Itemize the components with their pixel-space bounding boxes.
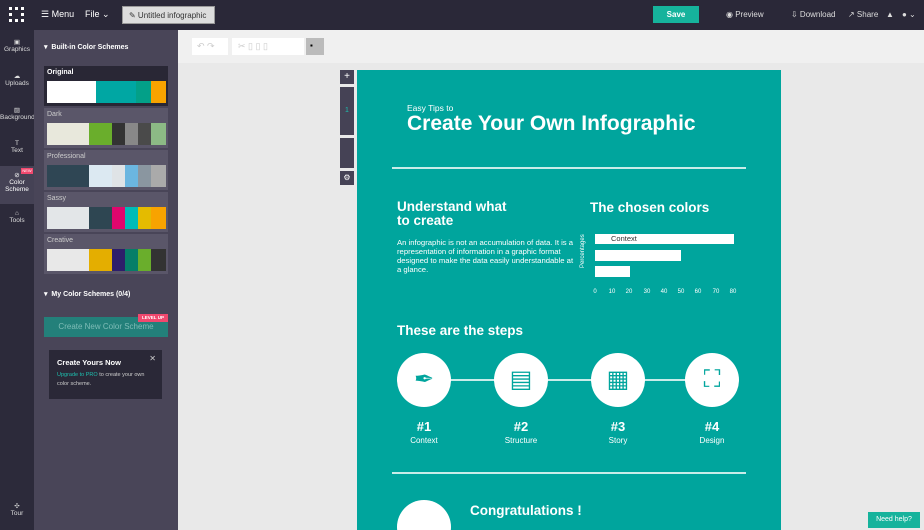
nav actions: ⇩ Download	[791, 10, 836, 19]
icon rail: ⌂	[15, 210, 19, 217]
section: chosen colors chart: 50	[678, 289, 684, 295]
step 2: #2	[514, 419, 528, 434]
nav actions: ▲	[886, 10, 894, 19]
page controls	[340, 70, 354, 185]
color scheme panel	[34, 30, 178, 530]
icon rail: Uploads	[5, 80, 29, 87]
title field: ✎ Untitled infographic	[129, 11, 206, 20]
scheme: creative: Creative	[47, 237, 73, 244]
title field	[122, 6, 215, 24]
icon rail	[0, 30, 34, 530]
scheme: dark: Dark	[47, 111, 62, 118]
icon rail: NEW	[22, 168, 32, 173]
step 4: ⛶	[704, 366, 720, 393]
icon rail: Graphics	[4, 46, 30, 53]
top bar	[0, 0, 924, 30]
step 2: Structure	[505, 436, 537, 445]
active color scheme tab: ⊘	[14, 172, 20, 179]
page controls: +	[344, 71, 350, 82]
scheme: dark	[44, 108, 168, 148]
icon rail: ▨	[14, 107, 20, 114]
section: chosen colors chart: 10	[609, 289, 615, 295]
page controls: ⚙	[343, 173, 351, 182]
step 1	[397, 353, 451, 445]
active color scheme tab	[0, 166, 34, 204]
section: understand: Understand what	[397, 199, 507, 214]
toolbar: ✂ ▯ ▯ ▯	[238, 41, 268, 51]
scheme: original: Original	[47, 69, 73, 76]
step 3: Story	[609, 436, 627, 445]
section: understand: to create	[397, 213, 453, 228]
icon rail: ✣	[14, 503, 20, 510]
save button: Save	[667, 10, 685, 19]
step 4: Design	[700, 436, 724, 445]
section: understand: An infographic is not an accumulation of data. It is a representation of information in a graphic format designed to make the data easily understandable at a glance.	[397, 238, 573, 274]
section: chosen colors chart: 30	[644, 289, 650, 295]
steps timeline	[397, 353, 739, 445]
tooltip	[49, 350, 162, 399]
title: Easy Tips to	[407, 103, 453, 113]
page controls: 1	[345, 107, 349, 114]
section: chosen colors chart: 80	[730, 289, 736, 295]
step 1: #1	[417, 419, 431, 434]
scheme: original	[44, 66, 168, 106]
save button	[653, 6, 699, 23]
scheme: sassy	[44, 192, 168, 232]
nav actions: ◉ Preview	[726, 10, 764, 19]
toolbar: ▪	[310, 41, 313, 50]
file menu: File ⌄	[85, 9, 110, 19]
icon rail: Tools	[9, 217, 25, 224]
icon rail: T	[15, 140, 19, 147]
tooltip: ✕	[149, 354, 156, 363]
title: Create Your Own Infographic	[407, 112, 696, 135]
scheme: professional	[44, 150, 168, 190]
logo	[9, 7, 24, 22]
heading: ▾ Built-in Color Schemes	[44, 44, 128, 51]
section: chosen colors chart: 40	[661, 289, 667, 295]
section: chosen colors chart: 20	[626, 289, 632, 295]
section: chosen colors chart: Context	[611, 234, 637, 243]
step 1: ✒	[414, 366, 434, 393]
step 4	[685, 353, 739, 445]
icon rail: Tour	[11, 510, 23, 517]
congratulations: Congratulations !	[470, 503, 582, 518]
nav actions	[726, 10, 916, 19]
congratulations	[397, 500, 582, 530]
toolbar: ↶ ↷	[197, 41, 215, 51]
step 3: ▦	[607, 366, 629, 393]
active color scheme tab: Scheme	[5, 186, 29, 193]
section: chosen colors chart: The chosen colors	[590, 200, 709, 215]
scheme: professional: Professional	[47, 153, 86, 160]
step 2: ▤	[510, 366, 532, 393]
my color schemes heading: ▾ My Color Schemes (0/4)	[44, 291, 130, 298]
section: chosen colors chart: 60	[695, 289, 701, 295]
icon rail: ☁	[14, 73, 20, 80]
level up badge: LEVEL UP	[142, 315, 164, 320]
active color scheme tab: Color	[9, 179, 25, 186]
level up badge	[138, 314, 168, 322]
icon rail: ▣	[14, 39, 20, 46]
step 1: Context	[410, 436, 438, 445]
tooltip: Upgrade to PRO to create your own color scheme.	[57, 372, 144, 387]
icon rail: Text	[11, 147, 23, 154]
step 3: #3	[611, 419, 625, 434]
scheme: creative	[44, 234, 168, 274]
section: understand	[397, 199, 574, 274]
step 3	[591, 353, 645, 445]
create button: Create New Color Scheme	[58, 322, 154, 331]
nav actions: ● ⌄	[902, 10, 916, 19]
nav actions: ↗ Share	[848, 10, 878, 19]
create button	[44, 317, 168, 337]
section: chosen colors chart	[580, 200, 736, 295]
toolbar	[178, 30, 924, 63]
need help button: Need help?	[876, 516, 912, 523]
scheme: sassy: Sassy	[47, 195, 66, 202]
menu: ☰ Menu	[41, 9, 74, 19]
step 2	[494, 353, 548, 445]
tooltip: Create Yours Now	[57, 358, 121, 367]
section: chosen colors chart: 70	[713, 289, 719, 295]
step 4: #4	[705, 419, 719, 434]
infographic canvas: Percentages	[580, 234, 586, 268]
section: chosen colors chart: 0	[593, 289, 597, 295]
need help button	[868, 512, 920, 528]
infographic canvas	[357, 70, 781, 530]
section: steps heading: These are the steps	[397, 323, 523, 338]
icon rail: Background	[0, 114, 35, 121]
